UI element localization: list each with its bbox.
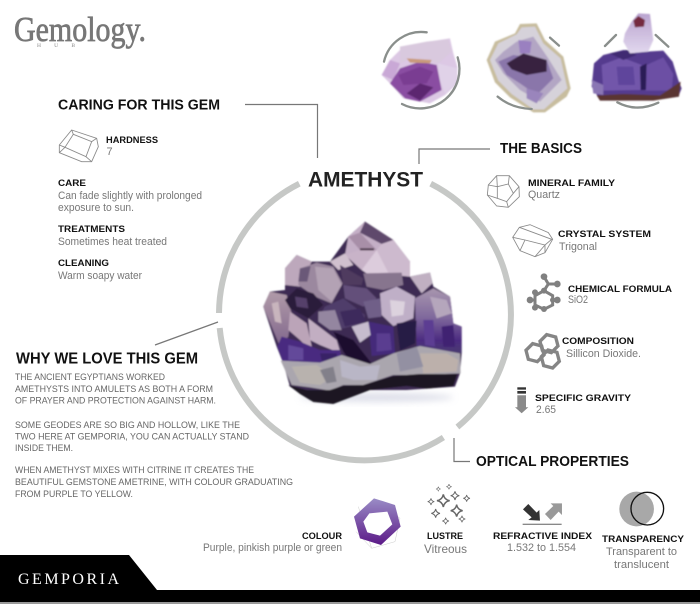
- logo: Gemology Hub: HUB: [37, 43, 75, 49]
- text: composition: COMPOSITION: [562, 336, 634, 347]
- text: chemical formula: SiO2: [568, 294, 588, 306]
- photo: amethyst cluster with point crystal and arcs: [592, 13, 682, 108]
- icon: composition hexagons: [526, 335, 559, 368]
- text: crystal system: CRYSTAL SYSTEM: [558, 229, 651, 240]
- text: mineral family: Quartz: [528, 189, 560, 201]
- text: hardness: 7: [106, 146, 113, 158]
- heading: why we love this gem: WHY WE LOVE THIS GEM: [16, 350, 198, 368]
- text: why we love body: THE ANCIENT EGYPTIANS WORKED: [15, 372, 165, 382]
- connector: optical properties to ring: [454, 438, 470, 462]
- text: specific gravity: SPECIFIC GRAVITY: [535, 393, 632, 404]
- photo: raw amethyst with arcs: [382, 32, 459, 108]
- icon: colour hexagon: [354, 498, 401, 548]
- photo: geode with arcs: [487, 23, 571, 112]
- text: refractive index: 1.532 to 1.554: [507, 542, 576, 554]
- text: why we love body: [15, 372, 293, 499]
- main amethyst crystal: [263, 222, 462, 404]
- text: transparency: TRANSPARENCY: [602, 534, 685, 545]
- text: chemical formula: [568, 284, 672, 306]
- title: AMETHYST: [308, 168, 423, 192]
- text: treatments: TREATMENTS: [58, 224, 125, 235]
- footer brand: Gemporia: GEMPORIA: [18, 571, 119, 588]
- text: transparency: [602, 534, 685, 571]
- text: hardness: [106, 135, 158, 158]
- text: care: CARE: [58, 178, 86, 189]
- text: hardness: HARDNESS: [106, 135, 158, 146]
- heading: the basics: THE BASICS: [500, 141, 582, 157]
- text: composition: [562, 336, 641, 360]
- icon: hardness gem: [59, 130, 98, 162]
- icon: transparency circles: [619, 492, 664, 526]
- text: colour: Purple, pinkish purple or green: [203, 542, 342, 554]
- heading: caring for this gem: CARING FOR THIS GEM: [58, 98, 220, 114]
- text: specific gravity: [535, 393, 632, 416]
- text: care: [58, 178, 202, 214]
- text: why we love body: INSIDE THEM.: [15, 443, 73, 453]
- text: transparency: Transparent to: [606, 546, 677, 558]
- icon: chemical formula molecule: [527, 273, 561, 312]
- icon: crystal system: [513, 225, 553, 257]
- connector: basics to title: [419, 149, 490, 164]
- heading: optical properties: OPTICAL PROPERTIES: [476, 454, 629, 470]
- text: cleaning: Warm soapy water: [58, 270, 142, 282]
- text: why we love body: FROM PURPLE TO YELLOW.: [15, 489, 133, 499]
- text: refractive index: REFRACTIVE INDEX: [493, 531, 593, 542]
- text: cleaning: CLEANING: [58, 258, 109, 269]
- text: treatments: Sometimes heat treated: [58, 236, 167, 248]
- text: crystal system: Trigonal: [559, 241, 597, 253]
- icon: specific gravity arrow: [515, 387, 528, 413]
- text: crystal system: [558, 229, 651, 253]
- text: colour: COLOUR: [302, 531, 342, 542]
- text: why we love body: TWO HERE AT GEMPORIA, YOU CAN ACTUALLY STAND: [15, 432, 249, 442]
- text: why we love body: WHEN AMETHYST MIXES WITH CITRINE IT CREATES THE: [15, 465, 254, 475]
- text: care: Can fade slightly with prolonged: [58, 190, 202, 202]
- text: chemical formula: CHEMICAL FORMULA: [568, 284, 672, 295]
- text: transparency: translucent: [614, 559, 669, 571]
- icon: mineral family: [487, 176, 519, 207]
- text: lustre: [424, 531, 467, 556]
- icon: lustre sparkles: [428, 484, 470, 524]
- footer bar: [0, 555, 700, 604]
- text: lustre: Vitreous: [424, 542, 467, 556]
- text: mineral family: [528, 178, 616, 201]
- text: refractive index: [493, 531, 593, 554]
- text: care: exposure to sun.: [58, 202, 134, 214]
- icon: refractive index arrows: [523, 503, 562, 525]
- ring around main crystal: [219, 184, 511, 460]
- text: why we love body: BEAUTIFUL GEMSTONE AMETRINE, WITH COLOUR GRADUATING: [15, 477, 293, 487]
- text: cleaning: [58, 258, 142, 282]
- text: mineral family: MINERAL FAMILY: [528, 178, 616, 189]
- text: composition: Sillicon Dioxide.: [566, 348, 641, 360]
- text: colour: [203, 531, 342, 554]
- connector: caring to title: [245, 104, 318, 158]
- text: lustre: LUSTRE: [427, 531, 463, 542]
- logo: Gemology Hub: Gemology.: [14, 10, 146, 49]
- text: treatments: [58, 224, 167, 248]
- text: why we love body: OF PRAYER AND PROTECTION AGAINST HARM.: [15, 396, 216, 406]
- text: specific gravity: 2.65: [536, 404, 556, 416]
- text: why we love body: AMETHYSTS INTO AMULETS AS BOTH A FORM: [15, 384, 213, 394]
- text: why we love body: SOME GEODES ARE SO BIG AND HOLLOW, LIKE THE: [15, 420, 240, 430]
- connector: why we love to ring: [155, 322, 218, 345]
